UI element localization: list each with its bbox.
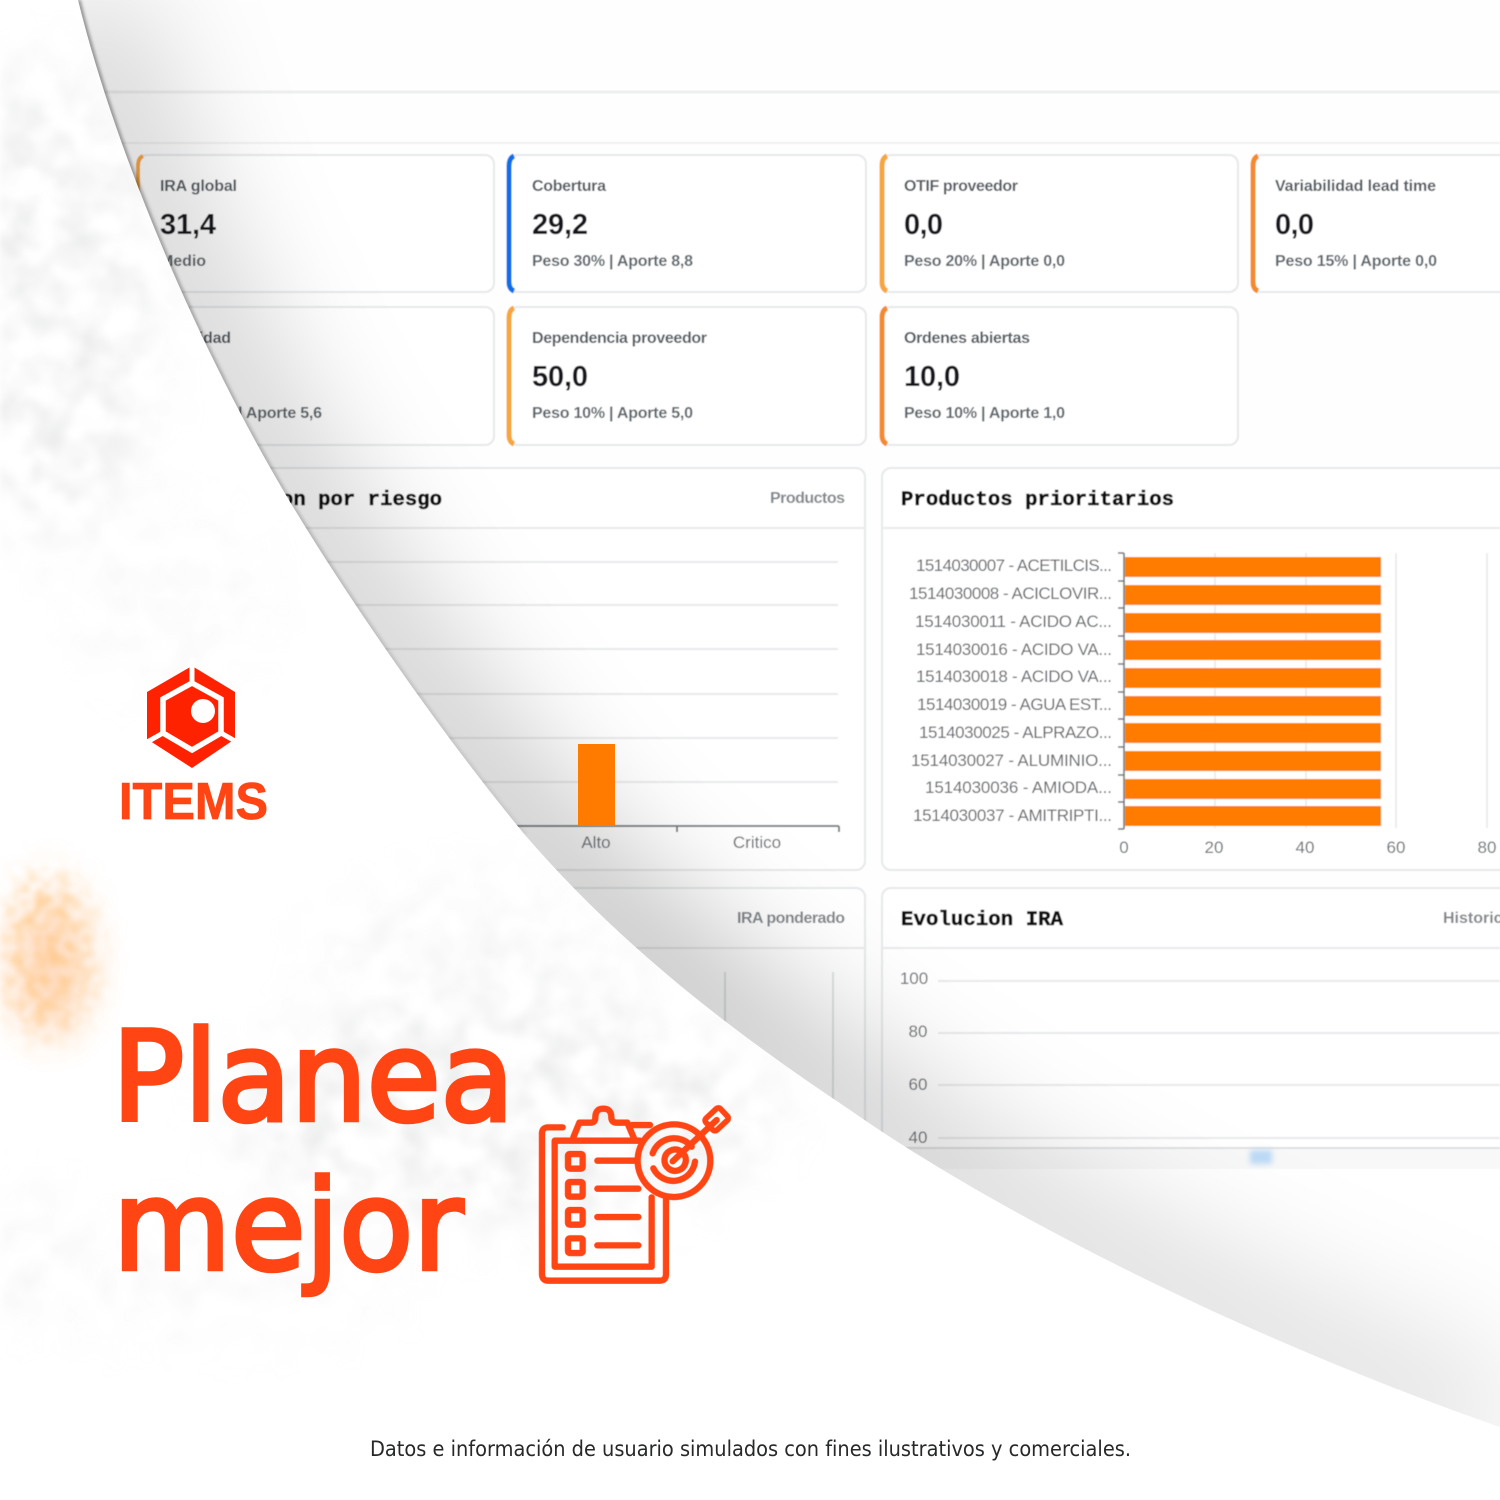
KPI card: Variabilidad lead time: Variabilidad lead time	[1275, 178, 1436, 195]
chart: horizontal bars: 1514030019 - AGUA EST...	[917, 695, 1112, 714]
panel: distribucion por riesgo: Critico	[733, 833, 781, 852]
KPI card: IRA global: IRA global	[160, 178, 237, 195]
panel: IRA ponderado	[138, 888, 865, 1188]
KPI card: IRA global: Medio	[160, 253, 206, 270]
chart: horizontal bars: 1514030027 - ALUMINIO...	[911, 751, 1112, 770]
panel: evolucion IRA: 80	[909, 1022, 927, 1041]
KPI card: OTIF proveedor: OTIF proveedor	[904, 178, 1018, 195]
watercolor texture	[0, 100, 738, 1216]
headline: Planea	[112, 1006, 514, 1150]
panel: evolucion IRA: Evolucion IRA	[901, 909, 1064, 932]
panel: evolucion IRA: 60	[909, 1075, 927, 1094]
KPI card: Dependencia proveedor: Peso 10% | Aporte 5,0	[532, 405, 693, 422]
axis	[200, 826, 839, 832]
chart: horizontal bars: 40	[1296, 838, 1314, 857]
panel: evolucion IRA: 100	[900, 969, 928, 988]
icon: clipboard with target	[542, 1107, 729, 1281]
panel: productos prioritarios	[882, 468, 1500, 870]
chart: horizontal bars: 1514030018 - ACIDO VA...	[916, 667, 1112, 686]
panel: distribucion por riesgo: Productos	[770, 490, 845, 507]
bar: Alto	[578, 744, 615, 826]
chart: horizontal bars: 1514030037 - AMITRIPTI...	[913, 806, 1112, 825]
chart: horizontal bars: 80	[1478, 838, 1496, 857]
KPI card: Dependencia proveedor: Dependencia proveedor	[532, 330, 707, 347]
KPI card: Dependencia proveedor	[509, 307, 866, 445]
chart: horizontal bars	[909, 553, 1496, 857]
KPI card: IRA global	[138, 155, 494, 292]
chart: horizontal bars: 1514030008 - ACICLOVIR...	[909, 584, 1112, 603]
KPI card: Variabilidad lead time	[1253, 155, 1500, 292]
KPI card: Dependencia proveedor: 50,0	[532, 361, 588, 393]
KPI card: OTIF proveedor: 0,0	[904, 209, 943, 241]
KPI card: OTIF proveedor	[882, 155, 1238, 292]
panel: distribucion por riesgo: Distribucion por riesgo	[157, 489, 442, 512]
chart: horizontal bars: 60	[1387, 838, 1405, 857]
KPI card: Disponibilidad: Peso 15% | Aporte 5,6	[161, 405, 322, 422]
KPI card: Ordenes abiertas: Peso 10% | Aporte 1,0	[904, 405, 1065, 422]
chart: horizontal bars: 1514030011 - ACIDO AC...	[915, 612, 1112, 631]
panel: distribucion por riesgo	[138, 468, 865, 870]
panel: evolucion IRA: 40	[909, 1128, 927, 1147]
logo wordmark: ITEMS	[119, 773, 268, 831]
chart: horizontal bars: 20	[1205, 838, 1223, 857]
KPI card: Variabilidad lead time: Peso 15% | Aporte 0,0	[1275, 253, 1437, 270]
KPI card: Ordenes abiertas	[882, 307, 1238, 445]
chart: horizontal bars: 0	[1119, 838, 1129, 857]
KPI card: Disponibilidad	[124, 307, 494, 445]
logo: ITEMS hexagon	[142, 658, 242, 768]
KPI card: IRA global: 31,4	[160, 209, 216, 241]
orange paint stain	[2, 870, 94, 1040]
KPI card: Disponibilidad: Disponibilidad	[124, 330, 231, 347]
chart: horizontal bars: 1514030016 - ACIDO VA...	[916, 640, 1112, 659]
headline	[112, 1006, 514, 1299]
disclaimer: Datos e información de usuario simulados con fines ilustrativos y comerciales.	[370, 1437, 1131, 1461]
panel: IRA ponderado: IRA ponderado	[737, 910, 845, 927]
KPI card: Cobertura: Peso 30% | Aporte 8,8	[532, 253, 693, 270]
KPI card: Cobertura: 29,2	[532, 209, 588, 241]
chart: horizontal bars: 1514030036 - AMIODA...	[925, 778, 1112, 797]
KPI card: Variabilidad lead time: 0,0	[1275, 209, 1314, 241]
KPI card: OTIF proveedor: Peso 20% | Aporte 0,0	[904, 253, 1065, 270]
chart: horizontal bars: 1514030007 - ACETILCIS...	[916, 556, 1112, 575]
panel: productos prioritarios: Productos prioritarios	[901, 489, 1174, 512]
KPI card: Cobertura: Cobertura	[532, 178, 606, 195]
panel: distribucion por riesgo: Alto	[581, 833, 611, 852]
KPI card: Cobertura	[509, 155, 866, 292]
headline: mejor	[113, 1155, 463, 1299]
chart: horizontal bars: 1514030025 - ALPRAZO...	[919, 723, 1112, 742]
KPI card: Ordenes abiertas: 10,0	[904, 361, 960, 393]
panel: evolucion IRA	[882, 888, 1500, 1188]
KPI card: Ordenes abiertas: Ordenes abiertas	[904, 330, 1030, 347]
